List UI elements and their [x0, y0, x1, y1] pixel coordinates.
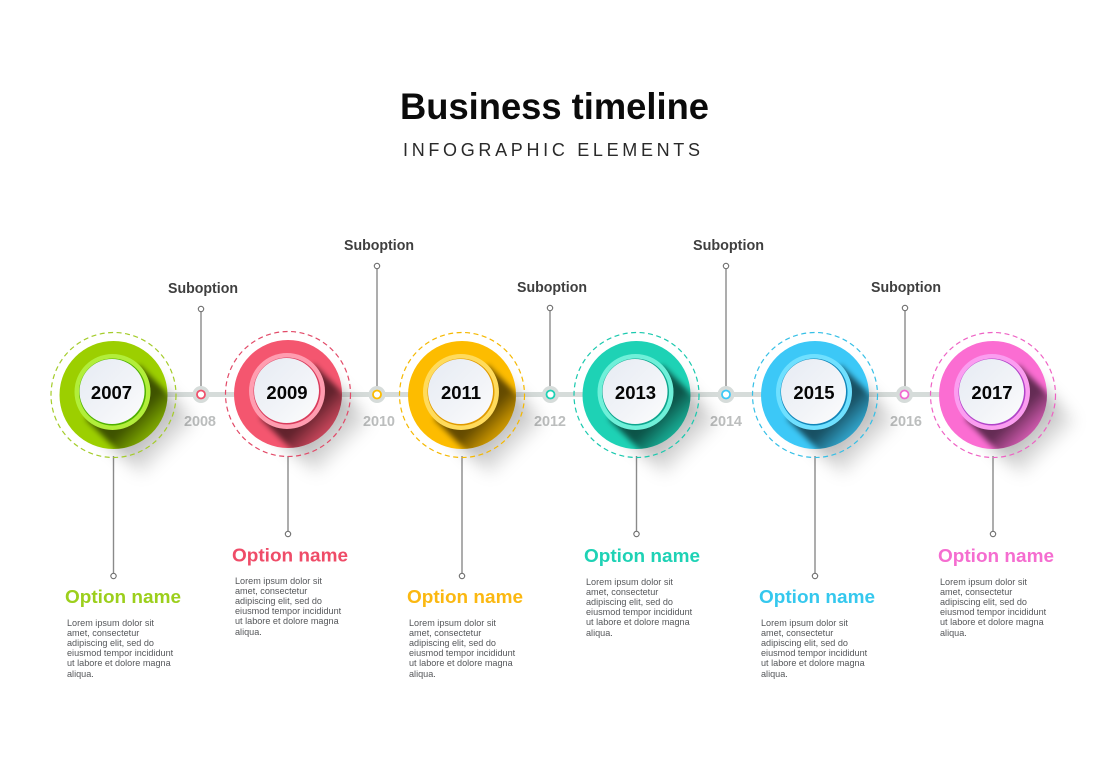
option block: 2009: Option name [232, 544, 348, 566]
option block: 2011: eiusmod tempor incididunt [409, 648, 516, 658]
connector: 2011 option [459, 456, 465, 579]
option block: 2015: amet, consectetur [761, 628, 833, 638]
connector: 2017 option [990, 456, 996, 537]
year label 2016: 2016 [890, 414, 922, 430]
option block: 2011 [407, 586, 523, 679]
circle: 2015 [752, 332, 898, 476]
circle: 2013 [574, 332, 719, 476]
option block: 2015: eiusmod tempor incididunt [761, 648, 868, 658]
option block: 2017: ut labore et dolore magna [940, 617, 1045, 627]
connector: 2016 suboption [902, 305, 908, 394]
option block: 2017: aliqua. [940, 628, 967, 638]
node: 2012 [542, 386, 559, 403]
option block: 2015: Option name [759, 586, 875, 607]
option block: 2009: ut labore et dolore magna [235, 616, 340, 626]
node: 2014 [718, 386, 734, 403]
option block: 2011: aliqua. [409, 669, 436, 679]
title: Business timeline [400, 86, 709, 127]
node: 2008 [192, 386, 210, 403]
year label 2012: 2012 [534, 414, 566, 430]
option block: 2015: aliqua. [761, 669, 788, 679]
option block: 2011: amet, consectetur [409, 628, 481, 638]
option block: 2007: amet, consectetur [67, 628, 139, 638]
option block: 2017 [938, 545, 1054, 638]
option block: 2015 [759, 586, 875, 679]
connector: 2010 suboption [374, 263, 380, 394]
suboption label 2012: Suboption [517, 280, 587, 296]
option block: 2007 [65, 586, 181, 679]
option block: 2013 [584, 545, 700, 638]
node: 2016 [896, 386, 913, 403]
option block: 2011: Lorem ipsum dolor sit [409, 618, 496, 628]
option block: 2013: amet, consectetur [586, 587, 658, 597]
connector: 2008 suboption [198, 306, 204, 394]
option block: 2007: eiusmod tempor incididunt [67, 648, 174, 658]
option block: 2017: Lorem ipsum dolor sit [940, 577, 1027, 587]
connector: 2009 option [285, 456, 291, 537]
circle: 2017: 2017 [971, 382, 1013, 403]
year label 2008: 2008 [184, 414, 216, 430]
option block: 2011: adipiscing elit, sed do [409, 638, 496, 648]
year label 2010: 2010 [363, 414, 395, 430]
timeline track [113, 392, 993, 397]
circle: 2007 [51, 332, 196, 476]
option block: 2013: Lorem ipsum dolor sit [586, 577, 673, 587]
circle: 2013: 2013 [615, 382, 656, 403]
option block: 2011: Option name [407, 586, 523, 607]
connector: 2012 suboption [547, 305, 553, 394]
option block: 2015: adipiscing elit, sed do [761, 638, 848, 648]
suboption label 2008: Suboption [168, 281, 238, 297]
circle: 2011 [400, 332, 544, 476]
option block: 2011: ut labore et dolore magna [409, 658, 514, 668]
connector: 2014 suboption [723, 263, 729, 394]
option block: 2015: Lorem ipsum dolor sit [761, 618, 848, 628]
option block: 2013: adipiscing elit, sed do [586, 597, 673, 607]
circle: 2009 [226, 332, 370, 474]
option block: 2017: eiusmod tempor incididunt [940, 607, 1047, 617]
option block: 2013: aliqua. [586, 628, 613, 638]
option block: 2007: Option name [65, 586, 181, 607]
option block: 2007: Lorem ipsum dolor sit [67, 618, 154, 628]
option block: 2009: amet, consectetur [235, 586, 307, 596]
option block: 2013: Option name [584, 545, 700, 566]
subtitle: INFOGRAPHIC ELEMENTS [403, 140, 700, 160]
circle: 2011: 2011 [441, 382, 481, 403]
option block: 2017: amet, consectetur [940, 587, 1012, 597]
option block: 2007: adipiscing elit, sed do [67, 638, 154, 648]
option block: 2007: aliqua. [67, 669, 94, 679]
year label 2014: 2014 [710, 414, 742, 430]
connector: 2015 option [812, 456, 818, 579]
circle: 2007: 2007 [91, 382, 132, 403]
option block: 2009: eiusmod tempor incididunt [235, 606, 342, 616]
connector: 2007 option [111, 456, 116, 579]
option block: 2009 [232, 544, 348, 637]
option block: 2009: Lorem ipsum dolor sit [235, 576, 322, 586]
option block: 2017: adipiscing elit, sed do [940, 597, 1027, 607]
option block: 2015: ut labore et dolore magna [761, 658, 866, 668]
option block: 2013: ut labore et dolore magna [586, 617, 691, 627]
option block: 2013: eiusmod tempor incididunt [586, 607, 693, 617]
circle: 2017 [930, 332, 1076, 476]
circle: 2015: 2015 [793, 382, 835, 403]
connector: 2013 option [634, 456, 639, 537]
option block: 2009: adipiscing elit, sed do [235, 596, 322, 606]
circle: 2009: 2009 [266, 382, 308, 403]
option block: 2009: aliqua. [235, 627, 262, 637]
node: 2010 [368, 386, 386, 403]
option block: 2007: ut labore et dolore magna [67, 658, 172, 668]
option block: 2017: Option name [938, 545, 1054, 566]
suboption label 2014: Suboption [693, 238, 764, 254]
suboption label 2016: Suboption [871, 280, 941, 296]
suboption label 2010: Suboption [344, 238, 414, 254]
